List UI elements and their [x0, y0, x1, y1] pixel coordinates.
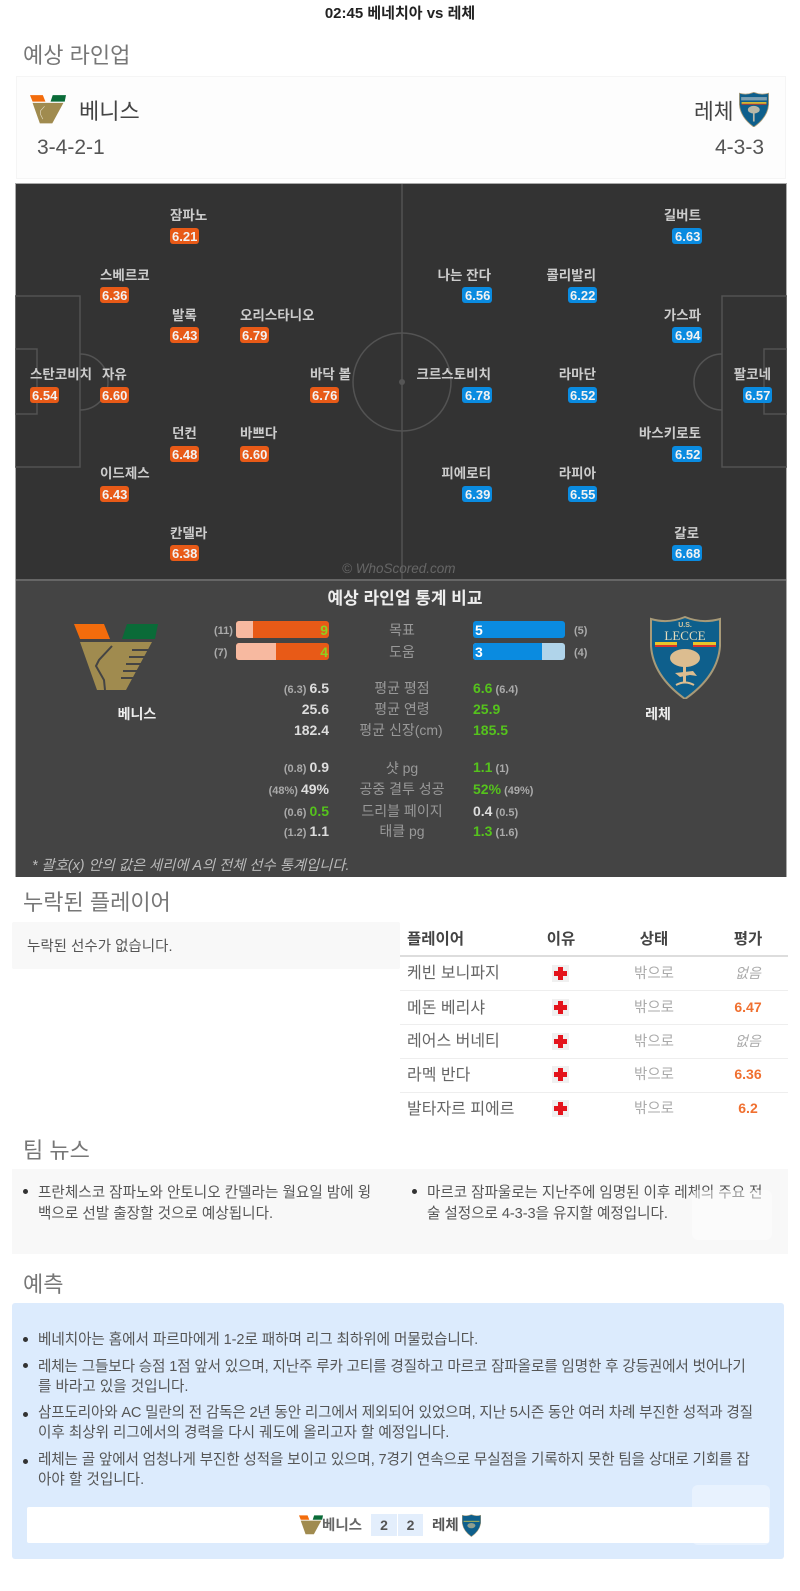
icon: Lecce crest: [739, 92, 769, 127]
away formation: 4-3-3: [715, 136, 764, 159]
player: home 10: 바쁘다: [240, 426, 278, 441]
title: 02:45 베네치아 vs 레체: [325, 5, 475, 22]
player: away 6: [559, 367, 597, 403]
icon: Lecce crest large: [651, 617, 720, 699]
prediction bullet 4: [23, 1452, 750, 1488]
footnote: * 괄호(x) 안의 값은 세리에 A의 전체 선수 통계입니다.: [32, 858, 349, 874]
player: away 4: 6.94: [675, 328, 701, 343]
player: home 7: 6.48: [172, 447, 197, 462]
player: away 10: [559, 466, 597, 502]
table: missing away players: 6.47: [734, 999, 762, 1015]
row: average age: 25.9: [473, 701, 500, 717]
row: dribbles: 드리블 페이지: [361, 803, 443, 819]
row: tackles: [284, 823, 518, 839]
prediction bullet 2: [23, 1358, 746, 1395]
table: missing away players: 발타자르 피에르: [407, 1101, 514, 1118]
news bullet 2: 마르코 잠파울로는 지난주에 임명된 이후 레체의 주요 전: [427, 1185, 762, 1201]
row: average rating: (6.3) 6.5: [284, 680, 329, 696]
prediction bullet 4: 레체는 골 앞에서 엄청나게 부진한 성적을 보이고 있으며, 7경기 연속으로 무실점을 기록하지 못한 팀을 상대로 기회를 잡: [38, 1452, 750, 1468]
row: shots per game: 샷 pg: [386, 760, 418, 776]
table: missing away players: [400, 930, 788, 1118]
player: home GK: [30, 367, 92, 403]
icon: Venezia crest: [30, 95, 66, 124]
watermark: [692, 1485, 770, 1545]
bar: goals home: 9: [320, 622, 328, 638]
player: home 11: 6.76: [312, 388, 337, 403]
player: away 8: 6.52: [675, 447, 700, 462]
table: missing away players: 상태: [640, 931, 668, 948]
row: average height: 185.5: [473, 722, 508, 738]
player: away 9: [441, 466, 492, 502]
player: away 11: [672, 526, 702, 561]
heading: prediction: 예측: [23, 1272, 63, 1297]
table: missing away players: 플레이어: [407, 931, 464, 948]
player: home 7: 던컨: [172, 426, 197, 441]
icon: Venezia crest large: [74, 624, 158, 690]
bar: assists home: 4: [320, 644, 328, 660]
player: home 8: 6.38: [172, 546, 197, 561]
bar: assists away: [473, 643, 588, 660]
player: away 10: 라피아: [559, 466, 597, 481]
row: tackles: (1.2) 1.1: [284, 823, 329, 839]
row: shots per game: 1.1 (1): [473, 759, 509, 775]
news bullet 2: [412, 1184, 762, 1222]
player: home GK: 6.54: [32, 388, 58, 403]
player: home 3: 자유: [102, 367, 127, 382]
row: average age: 평균 연령: [374, 701, 430, 717]
table: missing away players: 케빈 보니파지: [407, 965, 500, 982]
stats heading: 예상 라인업 통계 비교: [328, 589, 482, 608]
home score: 2: [380, 1517, 388, 1533]
icon: Lecce crest large: U.S.: [678, 622, 692, 629]
player: away 6: 6.52: [570, 388, 595, 403]
row: dribbles: (0.6) 0.5: [284, 803, 329, 819]
player: home 11: [310, 367, 351, 403]
watermark: [692, 1190, 772, 1240]
table: missing away players: 이유: [547, 931, 575, 948]
label: goals: 목표: [389, 622, 415, 638]
home name: 베니스: [118, 706, 156, 722]
player: away 8: 바스키로토: [639, 426, 701, 441]
player: home 6: 6.43: [172, 328, 197, 343]
panel: prediction: [12, 1303, 784, 1559]
player: away GK: 팔코네: [734, 367, 771, 382]
player: away 3: 콜리발리: [546, 268, 596, 283]
player: home 9: [240, 308, 315, 343]
table: missing away players: 6.2: [738, 1100, 758, 1116]
player: home 4: 이드제스: [100, 466, 150, 481]
icon: Venezia crest small: [299, 1515, 323, 1534]
panel: pitch and lineup stats: [15, 183, 787, 877]
bar: assists away: 3: [475, 644, 483, 660]
player: home 4: [100, 466, 150, 502]
table: missing away players: 없음: [735, 1033, 761, 1049]
table: missing away players: 밖으로: [634, 966, 674, 982]
panel: no missing home players: [12, 922, 400, 969]
prediction bullet 3: 삼프도리아와 AC 밀란의 전 감독은 2년 동안 리그에서 제외되어 있었으며, 지난 5시즌 동안 여러 차례 부진한 성적과 경질: [38, 1405, 753, 1421]
row: average rating: 6.6 (6.4): [473, 680, 518, 696]
prediction bullet 4: 아야 할 것입니다.: [38, 1472, 144, 1488]
row: tackles: 1.3 (1.6): [473, 823, 518, 839]
heading: missing players: 누락된 플레이어: [23, 890, 171, 915]
table: missing away players: 밖으로: [634, 1101, 674, 1117]
row: dribbles: 0.4 (0.5): [473, 803, 518, 819]
player: home 2: [100, 268, 150, 303]
table: missing away players: 6.36: [734, 1066, 762, 1082]
player: away 11: 갈로: [674, 526, 699, 541]
row: average height: 182.4: [294, 722, 329, 738]
row: average age: 25.6: [302, 701, 329, 717]
player: home 4: 6.43: [102, 487, 127, 502]
player: home 10: 6.60: [242, 447, 267, 462]
table: missing away players: 밖으로: [634, 1067, 674, 1083]
bar: goals home: (11): [214, 625, 233, 637]
player: home 3: [100, 367, 129, 403]
table: missing away players: 없음: [735, 965, 761, 981]
player: away GK: [734, 367, 772, 403]
bar: assists home: [214, 643, 329, 660]
heading: team news: 팀 뉴스: [23, 1138, 90, 1163]
away team name: 레체: [694, 100, 734, 124]
row: aerial duels: 52% (49%): [473, 781, 534, 797]
away team: 레체: [432, 1518, 459, 1534]
bar: goals away: (5): [574, 625, 588, 637]
heading: predicted lineups: 예상 라인업: [23, 43, 130, 68]
away score: [398, 1514, 423, 1536]
player: home 5: [170, 208, 207, 244]
player: away 1: 6.63: [675, 229, 700, 244]
player: home 3: 6.60: [102, 388, 127, 403]
icon: Lecce crest large: LECCE: [664, 628, 706, 643]
player: home 7: [170, 426, 199, 462]
table: missing away players: 밖으로: [634, 1034, 674, 1050]
player: home 9: 오리스타니오: [240, 308, 315, 323]
player: away 2: [438, 268, 492, 303]
prediction bullet 3: [23, 1404, 753, 1441]
news bullet 2: 술 설정으로 4-3-3을 유지할 예정입니다.: [427, 1206, 668, 1222]
away score: 2: [407, 1517, 414, 1533]
row: shots per game: (0.8) 0.9: [284, 759, 329, 775]
table: missing away players: 밖으로: [634, 1000, 674, 1016]
player: away 1: [664, 208, 702, 244]
row: average rating: 평균 평점: [374, 680, 430, 696]
label: assists: 도움: [389, 644, 415, 660]
row: average height: 평균 신장(cm): [359, 722, 443, 738]
row: aerial duels: 공중 결투 성공: [359, 781, 445, 797]
bar: goals away: [473, 621, 588, 638]
prediction bullet 3: 이후 최상위 리그에서의 경력을 다시 궤도에 올리고자 할 예정입니다.: [38, 1425, 449, 1441]
bar: goals away: 5: [475, 622, 483, 638]
prediction bullet 2: 를 바라고 있을 것입니다.: [38, 1379, 188, 1395]
player: home 2: 스베르코: [100, 268, 150, 283]
away name: 레체: [645, 706, 671, 722]
prediction bullet 2: 레체는 그들보다 승점 1점 앞서 있으며, 지난주 루카 고티를 경질하고 마르코 잠파올로를 임명한 후 강등권에서 벗어나기: [38, 1359, 746, 1375]
player: away 5: 6.78: [465, 388, 490, 403]
row: average height: [294, 722, 508, 738]
note text: 누락된 선수가 없습니다.: [27, 939, 172, 955]
player: away 4: 가스파: [664, 308, 702, 323]
player: away 2: 나는 잔다: [438, 268, 492, 283]
player: home 9: 6.79: [242, 328, 267, 343]
row: average age: [302, 701, 500, 717]
home formation: 3-4-2-1: [37, 136, 105, 159]
news bullet 1: 프란체스코 잠파노와 안토니오 칸델라는 월요일 밤에 윙: [38, 1185, 371, 1201]
panel: team news: [12, 1169, 788, 1254]
player: away 9: 6.39: [465, 487, 490, 502]
bar: goals home: [214, 621, 329, 638]
player: away 4: [664, 308, 702, 343]
player: away 10: 6.55: [570, 487, 595, 502]
bar: assists away: (4): [574, 647, 588, 659]
player: away 8: [639, 426, 702, 462]
player: away 3: 6.22: [570, 288, 595, 303]
player: away 9: 피에로티: [441, 466, 491, 481]
player: home 6: 발록: [172, 308, 197, 323]
news bullet 1: [23, 1184, 371, 1222]
player: home 6: [170, 308, 199, 343]
player: away 3: [546, 268, 597, 303]
player: home 8: 칸델라: [170, 526, 208, 541]
row: tackles: 태클 pg: [379, 823, 425, 839]
panel: team formations: [16, 76, 786, 179]
player: home GK: 스탄코비치: [30, 367, 92, 382]
row: average rating: [284, 680, 518, 696]
table: missing away players: 라멕 반다: [407, 1067, 470, 1084]
table: missing away players: 레어스 버네티: [407, 1033, 500, 1050]
player: home 5: 6.21: [172, 229, 197, 244]
table: missing away players: 메돈 베리샤: [407, 1000, 485, 1017]
home team: 베니스: [322, 1518, 362, 1534]
player: away 5: 크르스토비치: [416, 367, 491, 382]
player: away 6: 라마단: [559, 367, 597, 382]
player: away 5: [416, 367, 492, 403]
row: shots per game: [284, 759, 509, 776]
player: home 10: [240, 426, 278, 462]
prediction bullet 1: 베네치아는 홈에서 파르마에게 1-2로 패하며 리그 최하위에 머물렀습니다.: [38, 1332, 478, 1348]
row: aerial duels: [269, 781, 534, 797]
player: home 5: 잠파노: [170, 208, 207, 223]
player: away 11: 6.68: [675, 546, 700, 561]
player: away GK: 6.57: [745, 388, 770, 403]
row: aerial duels: (48%) 49%: [269, 781, 330, 797]
predicted score bar: [27, 1507, 769, 1543]
home score: [371, 1514, 397, 1536]
player: home 8: [170, 526, 208, 561]
player: away 2: 6.56: [465, 288, 490, 303]
bar: assists home: (7): [214, 647, 228, 659]
news bullet 1: 백으로 선발 출장할 것으로 예상됩니다.: [38, 1206, 273, 1222]
home team name: 베니스: [79, 99, 140, 124]
table: missing away players: 평가: [734, 931, 762, 948]
player: home 2: 6.36: [102, 288, 127, 303]
icon: Lecce crest small: [462, 1514, 481, 1537]
watermark: © WhoScored.com: [342, 561, 455, 576]
player: away 1: 길버트: [664, 208, 701, 223]
player: home 11: 바닥 볼: [310, 367, 351, 382]
row: dribbles: [284, 803, 518, 819]
